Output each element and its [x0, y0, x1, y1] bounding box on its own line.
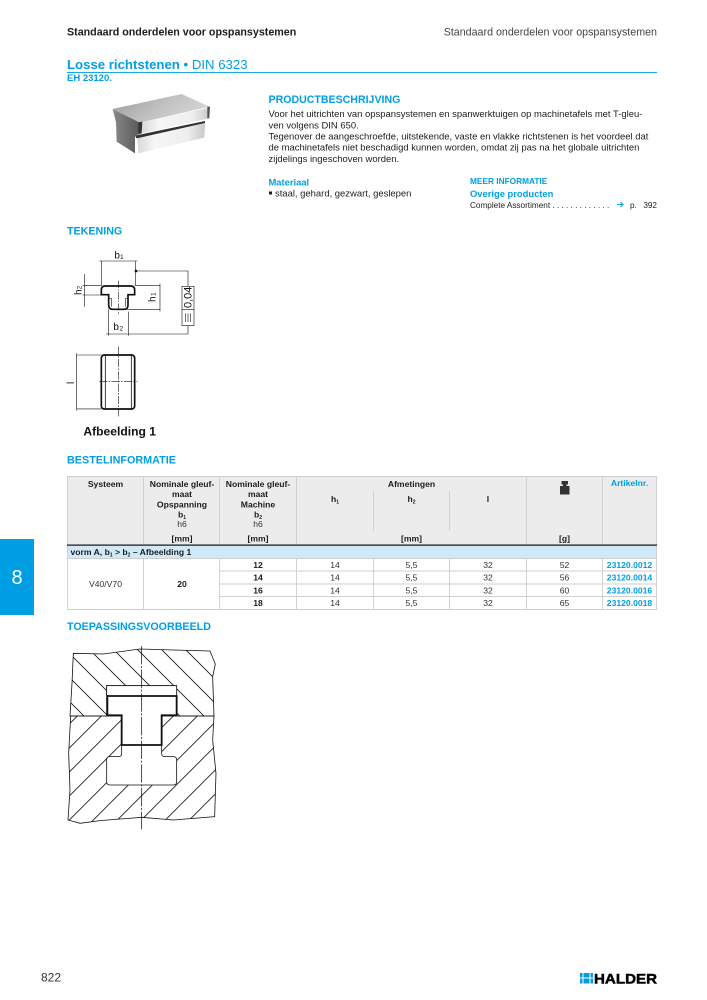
row 16: 32 [483, 586, 493, 596]
figure caption: Afbeelding 1 [83, 425, 157, 438]
heading: bestelinformatie: BESTELINFORMATIE [67, 454, 176, 466]
cross-section view: b [113, 322, 119, 333]
cross-section view: 2 [119, 326, 123, 333]
more information: 392 [643, 201, 657, 210]
row 18: 23120.0018 [607, 598, 652, 608]
cross-section view: h [74, 289, 85, 295]
centre line [141, 646, 143, 829]
title: Losse richtstenen • DIN 6323 [67, 57, 248, 72]
row 16 [253, 586, 652, 596]
group label: > b [113, 547, 128, 557]
row 12: 12 [253, 560, 263, 570]
column headers [88, 478, 648, 544]
column headers: h [407, 494, 413, 504]
column headers: h6 [177, 519, 187, 529]
heading: productbeschrijving: PRODUCTBESCHRIJVING [268, 94, 400, 106]
description text: ven volgens DIN 650. [268, 120, 359, 131]
column headers: Nominale gleuf- [226, 479, 290, 489]
row 14: 23120.0014 [607, 572, 652, 582]
technical drawing [66, 250, 195, 438]
column headers: 2 [413, 500, 416, 506]
row 16: 5,5 [406, 586, 418, 596]
column headers: l [487, 494, 489, 504]
material: staal, gehard, gezwart, geslepen [275, 188, 411, 200]
row 16: 23120.0016 [607, 586, 652, 596]
row 14: 56 [560, 572, 569, 582]
column headers: Machine [241, 500, 275, 510]
lower block [68, 716, 216, 823]
row 12: 23120.0012 [607, 560, 652, 570]
column headers: 2 [259, 515, 262, 521]
row 14: 5,5 [406, 572, 418, 582]
column headers: b [254, 510, 259, 520]
row 18: 32 [483, 598, 493, 608]
material: Materiaal [268, 176, 309, 188]
row 14 [253, 572, 652, 582]
more information: MEER INFORMATIE [470, 176, 548, 186]
description text: Voor het uitrichten van opspansystemen en spanwerktuigen op machinetafels met T-gleu- [268, 109, 642, 120]
T-key [107, 696, 177, 745]
row 16: 16 [253, 586, 263, 596]
group label: – Afbeelding 1 [130, 547, 191, 557]
application drawing [68, 646, 216, 829]
description text: de machinetafels niet beschadigd kunnen worden, omdat zij pas na het globale uitrichten [268, 143, 639, 154]
group label: 1 [110, 552, 113, 558]
cross-section view: 0,04 [183, 287, 195, 308]
row 12: 52 [560, 560, 569, 570]
grid lines [67, 476, 656, 610]
column headers: [mm] [171, 534, 193, 544]
chapter tab: 8 [11, 567, 23, 589]
column headers: b [178, 510, 183, 520]
title [67, 57, 657, 84]
description text: Tegenover de aangeschroefde, uitstekende, vaste en vlakke richtstenen is het voordeel dat [268, 131, 649, 142]
top view: l [66, 382, 77, 384]
cross-section view: h [147, 296, 158, 302]
page number: 822 [41, 970, 61, 984]
column headers: [mm] [247, 534, 269, 544]
clearance above key [107, 686, 177, 696]
group label: 2 [128, 552, 131, 558]
column headers: 1 [183, 515, 186, 521]
running header left: Standaard onderdelen voor opspansystemen [67, 26, 296, 38]
row 12 [253, 560, 652, 570]
column headers: h6 [253, 519, 263, 529]
group row [67, 546, 657, 558]
row 14: 14 [253, 572, 263, 582]
more information: p. [630, 201, 637, 210]
more information [470, 176, 657, 210]
row 18: 18 [253, 598, 263, 608]
column headers: h [331, 494, 336, 504]
column headers: maat [172, 489, 192, 499]
column headers: Systeem [88, 479, 124, 489]
row 18 [253, 598, 652, 608]
material [268, 176, 411, 200]
column headers: Nominale gleuf- [150, 479, 214, 489]
merged cells: V40/V70 [89, 579, 122, 589]
row 18: 5,5 [406, 598, 418, 608]
cross-section view: b [114, 250, 120, 261]
row 16: 14 [330, 586, 340, 596]
column headers: [g] [559, 534, 570, 544]
top view [66, 347, 137, 417]
title: EH 23120. [67, 73, 112, 84]
column headers: Artikelnr. [611, 478, 648, 488]
column headers: Afmetingen [388, 479, 435, 489]
row 12: 5,5 [406, 560, 418, 570]
more information: Overige producten [470, 188, 554, 199]
product photo [113, 94, 210, 153]
row 14: 14 [330, 572, 340, 582]
row 14: 32 [483, 572, 493, 582]
cross-section view: 1 [120, 254, 124, 261]
chapter tab [0, 539, 34, 615]
cross-section view: 2 [77, 285, 84, 289]
row 18: 65 [560, 598, 569, 608]
row 18: 14 [330, 598, 340, 608]
upper block [70, 649, 215, 716]
table header background [67, 476, 657, 545]
column headers: Opspanning [157, 500, 207, 510]
cross-section view [74, 250, 195, 336]
order table [67, 476, 657, 610]
row 16: 60 [560, 586, 569, 596]
order table: 20 [177, 579, 187, 589]
description text: zijdelings ingeschoven worden. [268, 154, 399, 165]
product description [268, 94, 649, 165]
cross-section view: 1 [150, 292, 157, 296]
column headers: 1 [336, 500, 339, 506]
icon: weight [560, 481, 570, 494]
heading: tekening: TEKENING [67, 226, 122, 238]
group label: vorm A, b [70, 547, 110, 557]
column headers: maat [248, 489, 268, 499]
row 12: 14 [330, 560, 340, 570]
more information: Complete Assortiment . . . . . . . . . . . . . [470, 201, 609, 210]
logo: HALDER: HALDER [594, 970, 657, 986]
heading: toepassingsvoorbeeld: TOEPASSINGSVOORBEELD [67, 621, 211, 633]
running header right: Standaard onderdelen voor opspansystemen [444, 26, 657, 38]
column headers: [mm] [401, 534, 422, 544]
row 12: 32 [483, 560, 493, 570]
